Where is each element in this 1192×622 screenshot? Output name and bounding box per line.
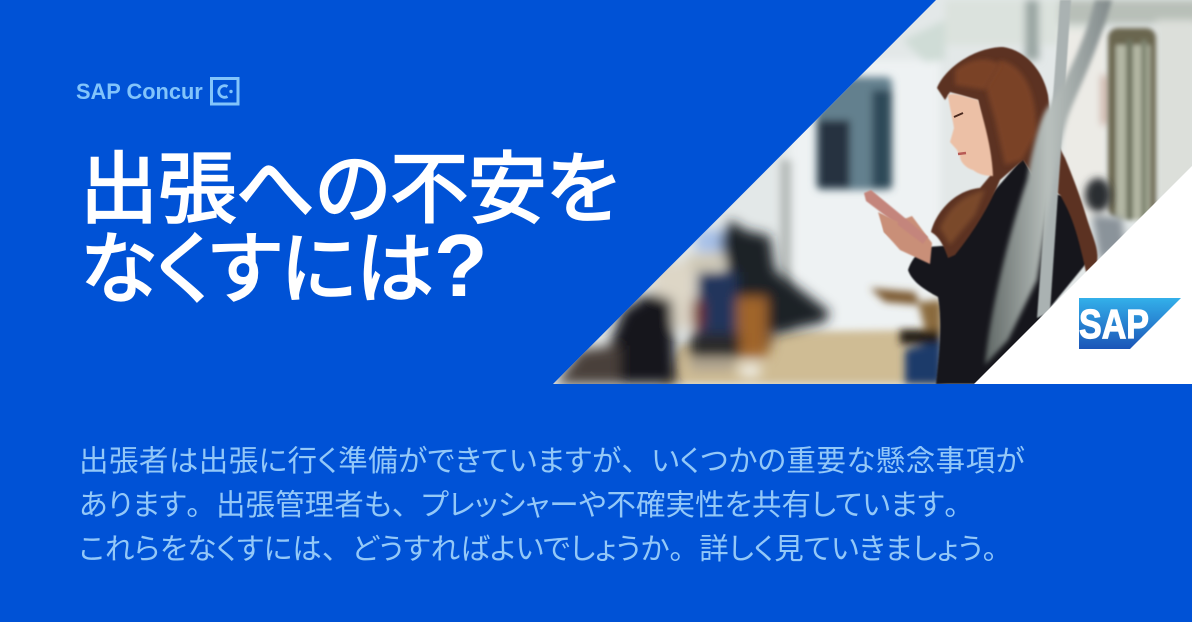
title: 出張への不安を	[80, 127, 618, 239]
icon: Concur mark	[210, 77, 240, 106]
brand logo: SAP Concur	[76, 77, 240, 106]
brand name: SAP Concur	[76, 79, 203, 104]
title	[80, 127, 618, 319]
jacket	[908, 158, 1093, 384]
far seat passengers	[870, 178, 1125, 384]
train window	[816, 77, 892, 190]
hand	[878, 212, 932, 264]
face	[948, 94, 993, 176]
photo: woman on train looking at phone	[553, 0, 1192, 384]
body text: あります。出張管理者も、プレッシャーや不確実性を共有しています。	[79, 482, 974, 524]
woman	[864, 47, 1097, 384]
icon: SAP logo: SAP	[1079, 301, 1149, 347]
seated passengers	[556, 220, 830, 384]
title: なくすには?	[80, 207, 488, 319]
body text	[79, 438, 1025, 568]
floor	[660, 330, 945, 384]
poles	[1037, 0, 1071, 318]
right door window	[1108, 28, 1156, 220]
body text: 出張者は出張に行く準備ができていますが、いくつかの重要な懸念事項が	[79, 438, 1025, 480]
hair	[931, 47, 1097, 272]
phone	[864, 190, 928, 244]
body text: これらをなくすには、どうすればよいでしょうか。詳しく見ていきましょう。	[79, 526, 1012, 568]
white corner	[974, 166, 1192, 384]
